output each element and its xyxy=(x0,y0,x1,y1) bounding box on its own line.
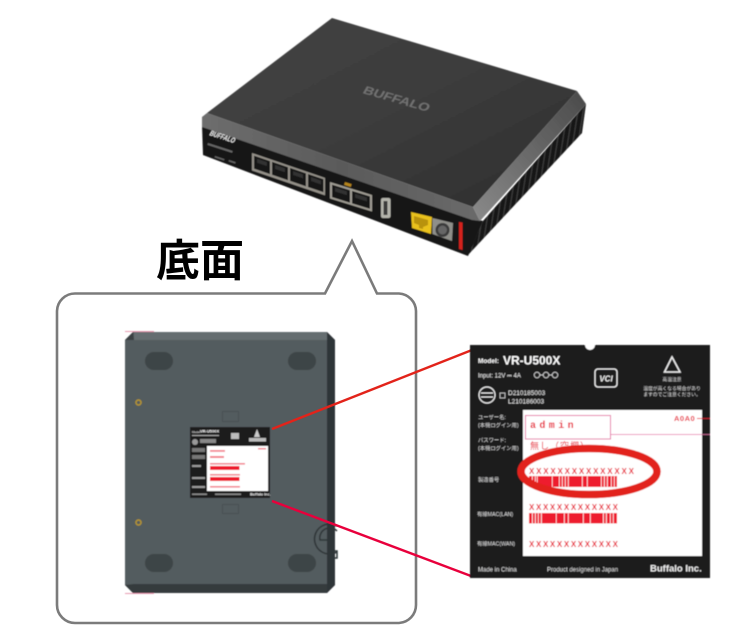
field names: 有線MAC(WAN) xyxy=(477,540,515,548)
router front logo: BUFFALO xyxy=(208,129,237,145)
warning text xyxy=(643,376,701,398)
router photo xyxy=(202,18,586,256)
warning text: ますのでご注意ください。 xyxy=(643,391,701,398)
field names: (本機ログイン用) xyxy=(478,421,519,429)
LAN MAC: XXXXXXXXXXXXX xyxy=(529,503,619,512)
cable clip xyxy=(315,524,337,558)
router front bevel xyxy=(202,113,480,221)
field names: (本機ログイン用) xyxy=(478,444,519,452)
warning text: 温度が高くなる場合があり xyxy=(643,385,701,392)
mini label: Buffalo Inc. xyxy=(250,492,271,496)
A0A0 leader xyxy=(697,418,710,420)
field names: パスワード: xyxy=(478,437,506,444)
serial number: XXXXXXXXXXXXXXX xyxy=(529,467,635,476)
callout line: top xyxy=(272,350,472,429)
rubber feet xyxy=(145,352,316,572)
model name xyxy=(478,354,560,368)
screw holes xyxy=(136,400,141,525)
power rating: Input: 12V ⎓ 4A xyxy=(478,374,521,380)
LAN ports group xyxy=(252,153,325,195)
VCI mark: VCI xyxy=(599,374,613,384)
red ellipse highlight xyxy=(521,448,657,494)
device bottom view xyxy=(125,332,337,594)
device right band xyxy=(327,332,335,593)
model name: Model: xyxy=(478,358,499,365)
router side vents xyxy=(468,104,586,255)
white data area xyxy=(523,410,702,556)
heading: 底面 xyxy=(156,225,244,289)
LAN barcode xyxy=(529,513,617,524)
mini label xyxy=(190,427,271,498)
WAN ports group xyxy=(330,182,372,212)
router front face xyxy=(202,125,483,256)
mini label: Model: xyxy=(192,430,201,434)
A0A0 code: A0A0 xyxy=(674,414,695,423)
device left corner xyxy=(125,332,134,340)
pink highlight box xyxy=(526,416,610,439)
WAN MAC: XXXXXXXXXXXXX xyxy=(529,540,619,549)
footer text: Made in China xyxy=(478,568,517,574)
pink leader line xyxy=(610,434,710,436)
warning text: 高温注意 xyxy=(662,376,682,383)
warning triangle xyxy=(664,357,680,372)
certification numbers xyxy=(508,390,546,406)
enlarged product label xyxy=(470,340,710,578)
VCI mark xyxy=(595,369,617,387)
power socket xyxy=(432,218,453,241)
password value: 無し（空欄） xyxy=(530,440,590,451)
router status labels xyxy=(207,143,236,164)
device bottom band xyxy=(125,584,327,593)
model name: VR-U500X xyxy=(503,354,560,368)
footer text: Product designed in Japan xyxy=(547,568,618,574)
pink crop marks xyxy=(125,332,154,594)
polarity symbol xyxy=(534,372,558,378)
field names: 製造番号 xyxy=(478,476,500,484)
label notch xyxy=(585,340,595,350)
certification numbers: D210185003 xyxy=(508,390,546,397)
field names: ユーザー名: xyxy=(478,413,506,421)
admin value: admin xyxy=(530,420,577,432)
device top band xyxy=(134,332,327,340)
red strip xyxy=(459,222,462,250)
device body xyxy=(125,332,335,593)
USB port xyxy=(381,198,390,218)
label recesses xyxy=(222,412,238,514)
mini label: VR-U500X xyxy=(200,428,219,434)
field names: 有線MAC(LAN) xyxy=(477,510,513,518)
label background xyxy=(470,345,710,578)
callout line: bottom xyxy=(272,501,471,576)
certification numbers: L210186003 xyxy=(508,398,545,406)
router right bevel xyxy=(473,91,586,221)
certification mark xyxy=(479,387,505,403)
amber indicator xyxy=(344,182,352,187)
yellow console port xyxy=(411,212,432,234)
field names xyxy=(477,413,519,548)
speech bubble panel xyxy=(57,241,416,623)
serial barcode xyxy=(529,476,617,487)
brand text: Buffalo Inc. xyxy=(650,564,702,574)
footer text xyxy=(478,568,618,574)
router top surface xyxy=(207,18,577,207)
router top logo: BUFFALO xyxy=(360,84,432,114)
